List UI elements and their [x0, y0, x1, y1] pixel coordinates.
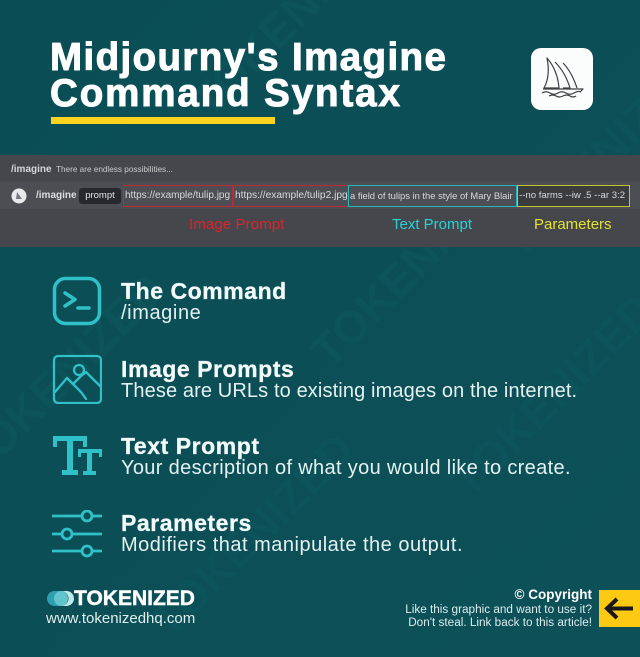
wordmark: TOKENIZED	[74, 587, 195, 610]
icon: bot avatar	[12, 188, 26, 204]
logo mark	[47, 591, 74, 606]
copyright heading: © Copyright	[515, 587, 592, 602]
panel: Discord command bar	[0, 155, 640, 247]
title	[50, 36, 447, 115]
website URL: www.tokenizedhq.com	[46, 610, 195, 627]
watermark background: TOKENIZED	[300, 153, 524, 377]
label: Text Prompt: Text Prompt	[392, 216, 472, 233]
input row	[0, 182, 640, 209]
icon: text size	[53, 436, 102, 475]
prompt chip: prompt	[85, 190, 115, 201]
label: Parameters: Parameters	[534, 216, 612, 233]
icon: sliders	[52, 510, 102, 558]
text prompt: a field of tulips in the style of Mary Blair	[350, 190, 513, 201]
heading: Text Prompt: Text Prompt	[121, 433, 260, 459]
heading: The Command: The Command	[121, 278, 287, 304]
text prompt	[348, 185, 517, 207]
prompt hint text: There are endless possibilities...	[56, 165, 173, 174]
parameters	[517, 185, 630, 207]
image prompt URLs: https://example/tulip2.jpg	[235, 190, 348, 201]
image prompt URLs: https://example/tulip.jpg	[125, 190, 230, 201]
icon: back arrow	[599, 590, 640, 627]
title underline	[51, 117, 275, 124]
text: parameters description: Modifiers that manipulate the output.	[121, 534, 463, 556]
watermark background: TOKENIZED	[140, 423, 364, 647]
logo: Tokenized	[47, 587, 195, 610]
text: image prompts description: These are URLs to existing images on the internet.	[121, 380, 577, 402]
title: Command Syntax	[50, 72, 402, 115]
heading: Image Prompts: Image Prompts	[121, 356, 294, 382]
parameters: --no farms --iw .5 --ar 3:2	[519, 190, 625, 201]
copyright text: Like this graphic and want to use it?	[405, 603, 592, 616]
command label: /imagine	[36, 190, 77, 201]
copyright text	[405, 603, 592, 629]
label: Image Prompt: Image Prompt	[189, 216, 284, 233]
icon: Midjourney logo	[531, 48, 593, 110]
text: text prompt description: Your description of what you would like to create.	[121, 457, 571, 479]
icon: terminal	[52, 276, 102, 326]
copyright text: Don't steal. Link back to this article!	[408, 616, 592, 629]
prompt chip	[79, 188, 121, 204]
text: /imagine: /imagine	[121, 302, 201, 324]
icon: image	[52, 354, 102, 404]
heading: Parameters: Parameters	[121, 510, 252, 536]
image prompt URLs	[123, 185, 348, 207]
title: Midjourny's Imagine	[50, 36, 447, 79]
prompt hint command: /imagine	[11, 164, 52, 175]
